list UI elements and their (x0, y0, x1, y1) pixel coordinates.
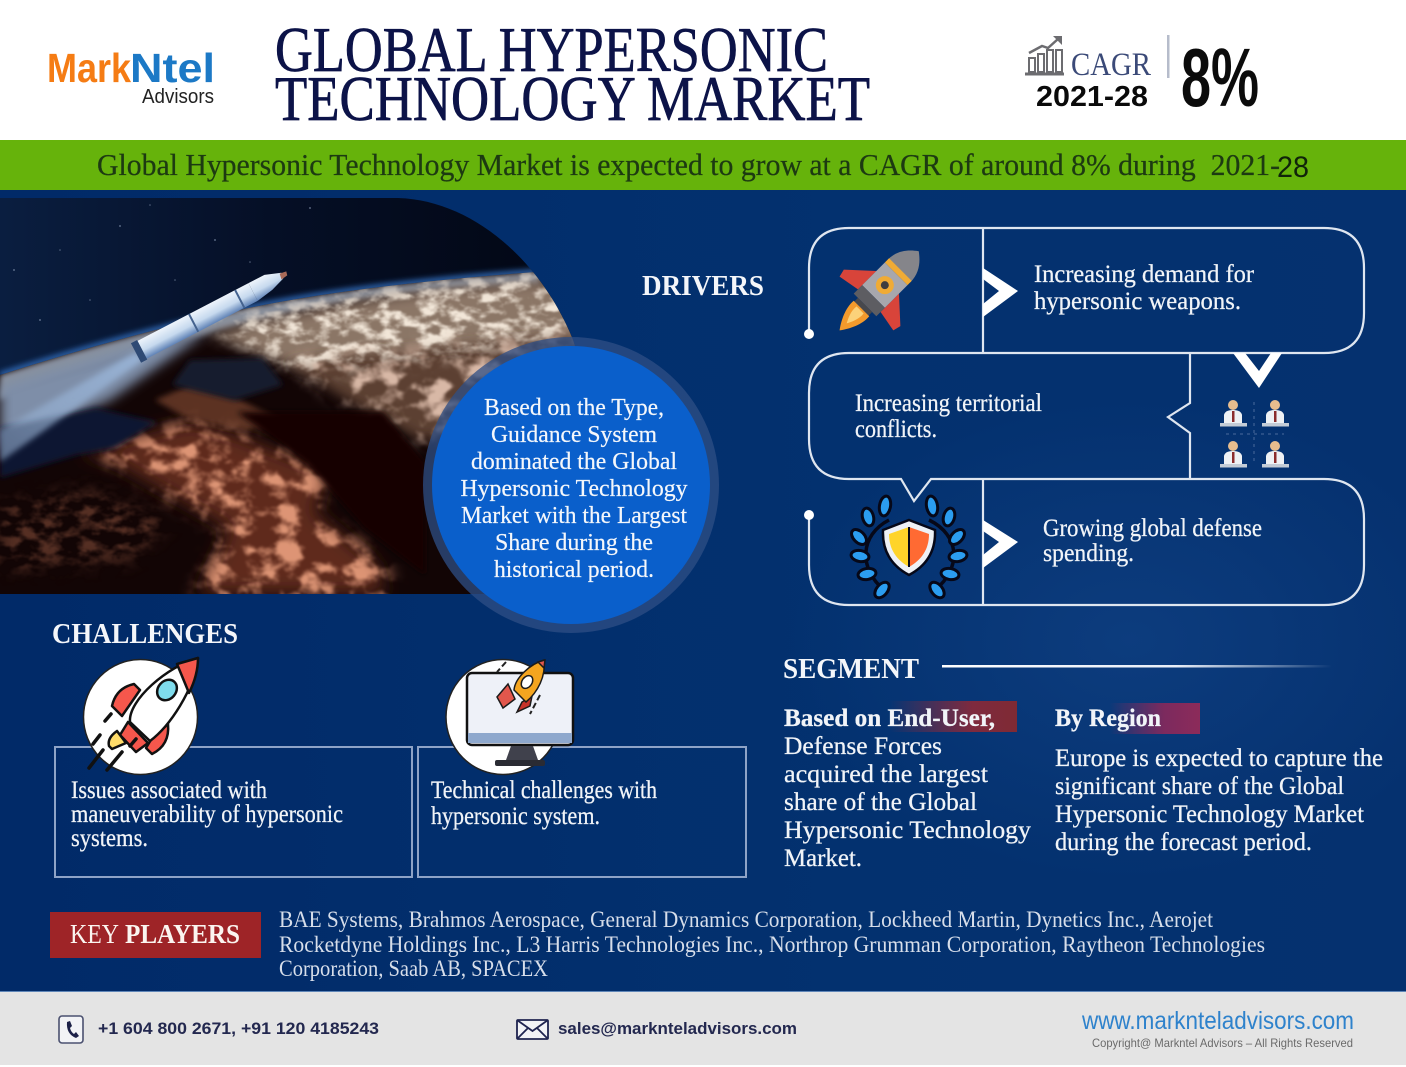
segment: by region: By Region (1055, 705, 1161, 732)
rocket (131, 264, 293, 363)
banner: Global Hypersonic Technology Market is expected to grow at a CAGR of around 8% during 2021- (97, 147, 1280, 182)
land mass: base tones (210, 278, 600, 372)
banner: 28 (1277, 151, 1309, 184)
text: driver 2 (855, 390, 1042, 443)
dark water (172, 358, 283, 400)
segment: end-user: Based on End-User, (784, 705, 995, 732)
segment: by region: significant share of the Global (1055, 773, 1344, 800)
text: company list: Rocketdyne Holdings Inc., L3 Harris Technologies Inc., Northrop Grumman Corporation, Raytheon Technologies (279, 932, 1265, 957)
badge: key players: PLAYERS (125, 919, 240, 949)
limb haze (0, 272, 540, 400)
segment: by region: Europe is expected to capture the (1055, 745, 1383, 772)
text: copyright: Copyright@ Markntel Advisors – All Rights Reserved (1092, 1036, 1353, 1050)
image: missile above earth (0, 198, 600, 600)
callout: type segment circle: Based on the Type, (484, 395, 664, 421)
text: email: sales@marknteladvisors.com (558, 1020, 797, 1038)
logo: MarkNtel Advisors: Advisors (142, 86, 214, 108)
callout: type segment circle: Hypersonic Technology (460, 476, 688, 502)
banner (0, 140, 1406, 190)
icon: phone (59, 1016, 83, 1043)
heading: segment: SEGMENT (783, 653, 919, 685)
text: challenge 2 (431, 777, 657, 830)
arrow: driver 3 (983, 520, 1018, 568)
drivers flow diagram (804, 223, 1364, 605)
segment: by region (1055, 703, 1383, 856)
callout: type segment circle: Guidance System (491, 422, 657, 448)
title (275, 15, 870, 134)
cloud texture (210, 272, 590, 372)
icon: rocket badge (84, 658, 198, 774)
CAGR value: 8% (1181, 31, 1259, 124)
segment: end-user: share of the Global (784, 789, 977, 816)
title: GLOBAL HYPERSONIC (275, 15, 828, 85)
text: phone numbers: +1 604 800 2671, +91 120 4185243 (98, 1020, 379, 1038)
header (47, 15, 1259, 134)
text: company list (279, 907, 1265, 981)
key players (50, 907, 1265, 981)
segment: end-user: Defense Forces (784, 733, 942, 760)
icon: envelope (517, 1020, 548, 1039)
segment: end-user: Market. (784, 845, 862, 872)
segment: end-user: acquired the largest (784, 761, 988, 788)
text: driver 3: spending. (1043, 540, 1134, 567)
CAGR period: 2021-28 (1036, 81, 1148, 113)
title: TECHNOLOGY MARKET (275, 64, 870, 134)
text: driver 2: conflicts. (855, 416, 937, 443)
text: challenge 1: maneuverability of hypersonic (71, 801, 343, 828)
text: driver 1: hypersonic weapons. (1034, 288, 1241, 315)
segment: by region: during the forecast period. (1055, 829, 1312, 856)
badge: key players (50, 912, 261, 958)
icon: four delegates (1220, 400, 1289, 468)
text: driver 1 (1034, 261, 1255, 315)
heading: drivers: DRIVERS (642, 270, 764, 302)
text: challenge 2: hypersonic system. (431, 803, 600, 830)
text: driver 3: Growing global defense (1043, 515, 1262, 542)
icon: monitor with rocket (446, 660, 573, 774)
arrow: driver 1 (983, 268, 1018, 317)
text: challenge 1: systems. (71, 825, 148, 852)
text: driver 2: Increasing territorial (855, 390, 1042, 417)
callout: type segment circle: dominated the Global (471, 449, 677, 475)
text: driver 3 (1043, 515, 1262, 567)
icon: shield with wreath (849, 495, 968, 600)
segment section (783, 653, 1383, 872)
icon: CAGR bar chart (1025, 36, 1064, 74)
heading: challenges: CHALLENGES (52, 618, 238, 650)
logo: MarkNtel Advisors (47, 45, 215, 108)
text: company list: Corporation, Saab AB, SPACEX (279, 956, 548, 981)
callout: type segment circle: historical period. (494, 557, 654, 583)
text: challenge 2: Technical challenges with (431, 777, 657, 804)
icon: missile (811, 223, 947, 359)
callout: type segment circle (423, 337, 719, 633)
segment: end-user: Hypersonic Technology (784, 817, 1032, 844)
text: challenge 1 (71, 777, 343, 852)
arrow: driver 2 (1233, 353, 1282, 388)
text: website: www.marknteladvisors.com (1081, 1007, 1354, 1035)
exhaust trail (0, 352, 143, 462)
text: challenge 1: Issues associated with (71, 777, 267, 804)
callout: type segment circle: Share during the (495, 530, 653, 556)
panel: challenge 1 (55, 658, 412, 877)
callout: type segment circle: Market with the Largest (461, 503, 687, 529)
badge: key players: KEY (70, 919, 119, 949)
footer (0, 992, 1406, 1065)
text: company list: BAE Systems, Brahmos Aerospace, General Dynamics Corporation, Lockheed Martin, Dynetics Inc., Aerojet (279, 907, 1214, 932)
panel: challenge 2 (418, 660, 746, 877)
logo: MarkNtel Advisors: Mark (47, 45, 131, 91)
segment: end-user (784, 701, 1032, 872)
text: driver 1: Increasing demand for (1034, 261, 1255, 288)
divider (1167, 35, 1170, 78)
flow outline (809, 228, 1364, 605)
logo: MarkNtel Advisors: Ntel (130, 45, 215, 91)
main navy panel (0, 190, 1406, 992)
CAGR label: CAGR (1071, 47, 1151, 83)
segment: by region: Hypersonic Technology Market (1055, 801, 1364, 828)
